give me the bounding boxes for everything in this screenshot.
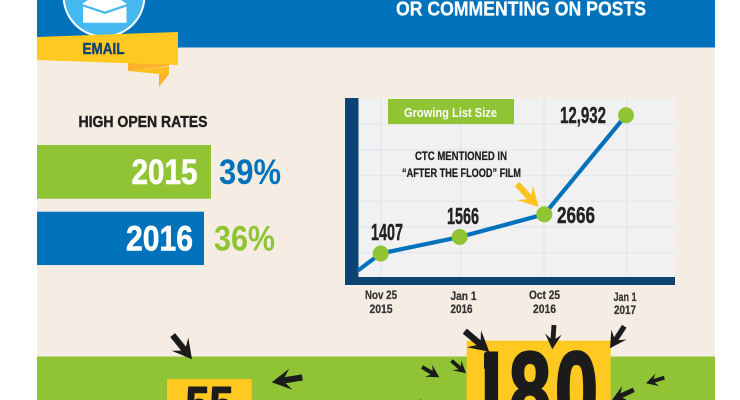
x axis labels: Jan 1 (450, 289, 477, 303)
panel: blue header band (37, 0, 715, 48)
annotation: film mention (402, 149, 521, 180)
value: 36%: 36% (214, 220, 275, 258)
data labels: 2666 (557, 202, 595, 228)
chart title (388, 99, 514, 124)
x axis labels: Oct 25 (529, 288, 560, 302)
ribbon: email label (37, 32, 178, 87)
x axis labels (365, 288, 637, 317)
panel: green bottom band (37, 356, 715, 400)
data labels: 1566 (447, 203, 479, 229)
x axis labels: 2016 (533, 302, 556, 316)
x axis labels: 2017 (614, 303, 636, 317)
bar: 2015 open rate: 2015 (132, 153, 198, 192)
heading: high open rates: HIGH OPEN RATES (78, 114, 208, 131)
arrows: pointing at callouts (164, 321, 666, 400)
bar: 2016 open rate: 2016 (126, 220, 193, 258)
data labels: 1407 (371, 219, 403, 245)
icon: email envelope (64, 0, 144, 36)
x axis labels: 2016 (450, 302, 473, 316)
callout: 55 (167, 377, 252, 400)
text: email: EMAIL (82, 41, 125, 58)
bar: 2015 open rate (37, 145, 281, 199)
chart title: Growing List Size (404, 105, 497, 120)
x axis labels: Nov 25 (365, 288, 397, 302)
x axis labels: 2015 (370, 302, 393, 316)
x axis labels: Jan 1 (614, 290, 637, 304)
line series (358, 115, 626, 270)
arrow: yellow annotation pointer (509, 177, 546, 214)
data points (373, 107, 634, 262)
data labels (371, 102, 606, 245)
panel: cream background (37, 47, 715, 357)
data labels: 12,932 (560, 102, 606, 128)
bar: 2016 open rate (37, 212, 275, 265)
chart: growing list size (345, 98, 675, 317)
value: 39%: 39% (219, 153, 281, 192)
annotation: film mention: CTC MENTIONED IN (415, 149, 507, 163)
callout: 180 (466, 340, 611, 400)
annotation: film mention: “AFTER THE FLOOD” FILM (402, 166, 521, 180)
